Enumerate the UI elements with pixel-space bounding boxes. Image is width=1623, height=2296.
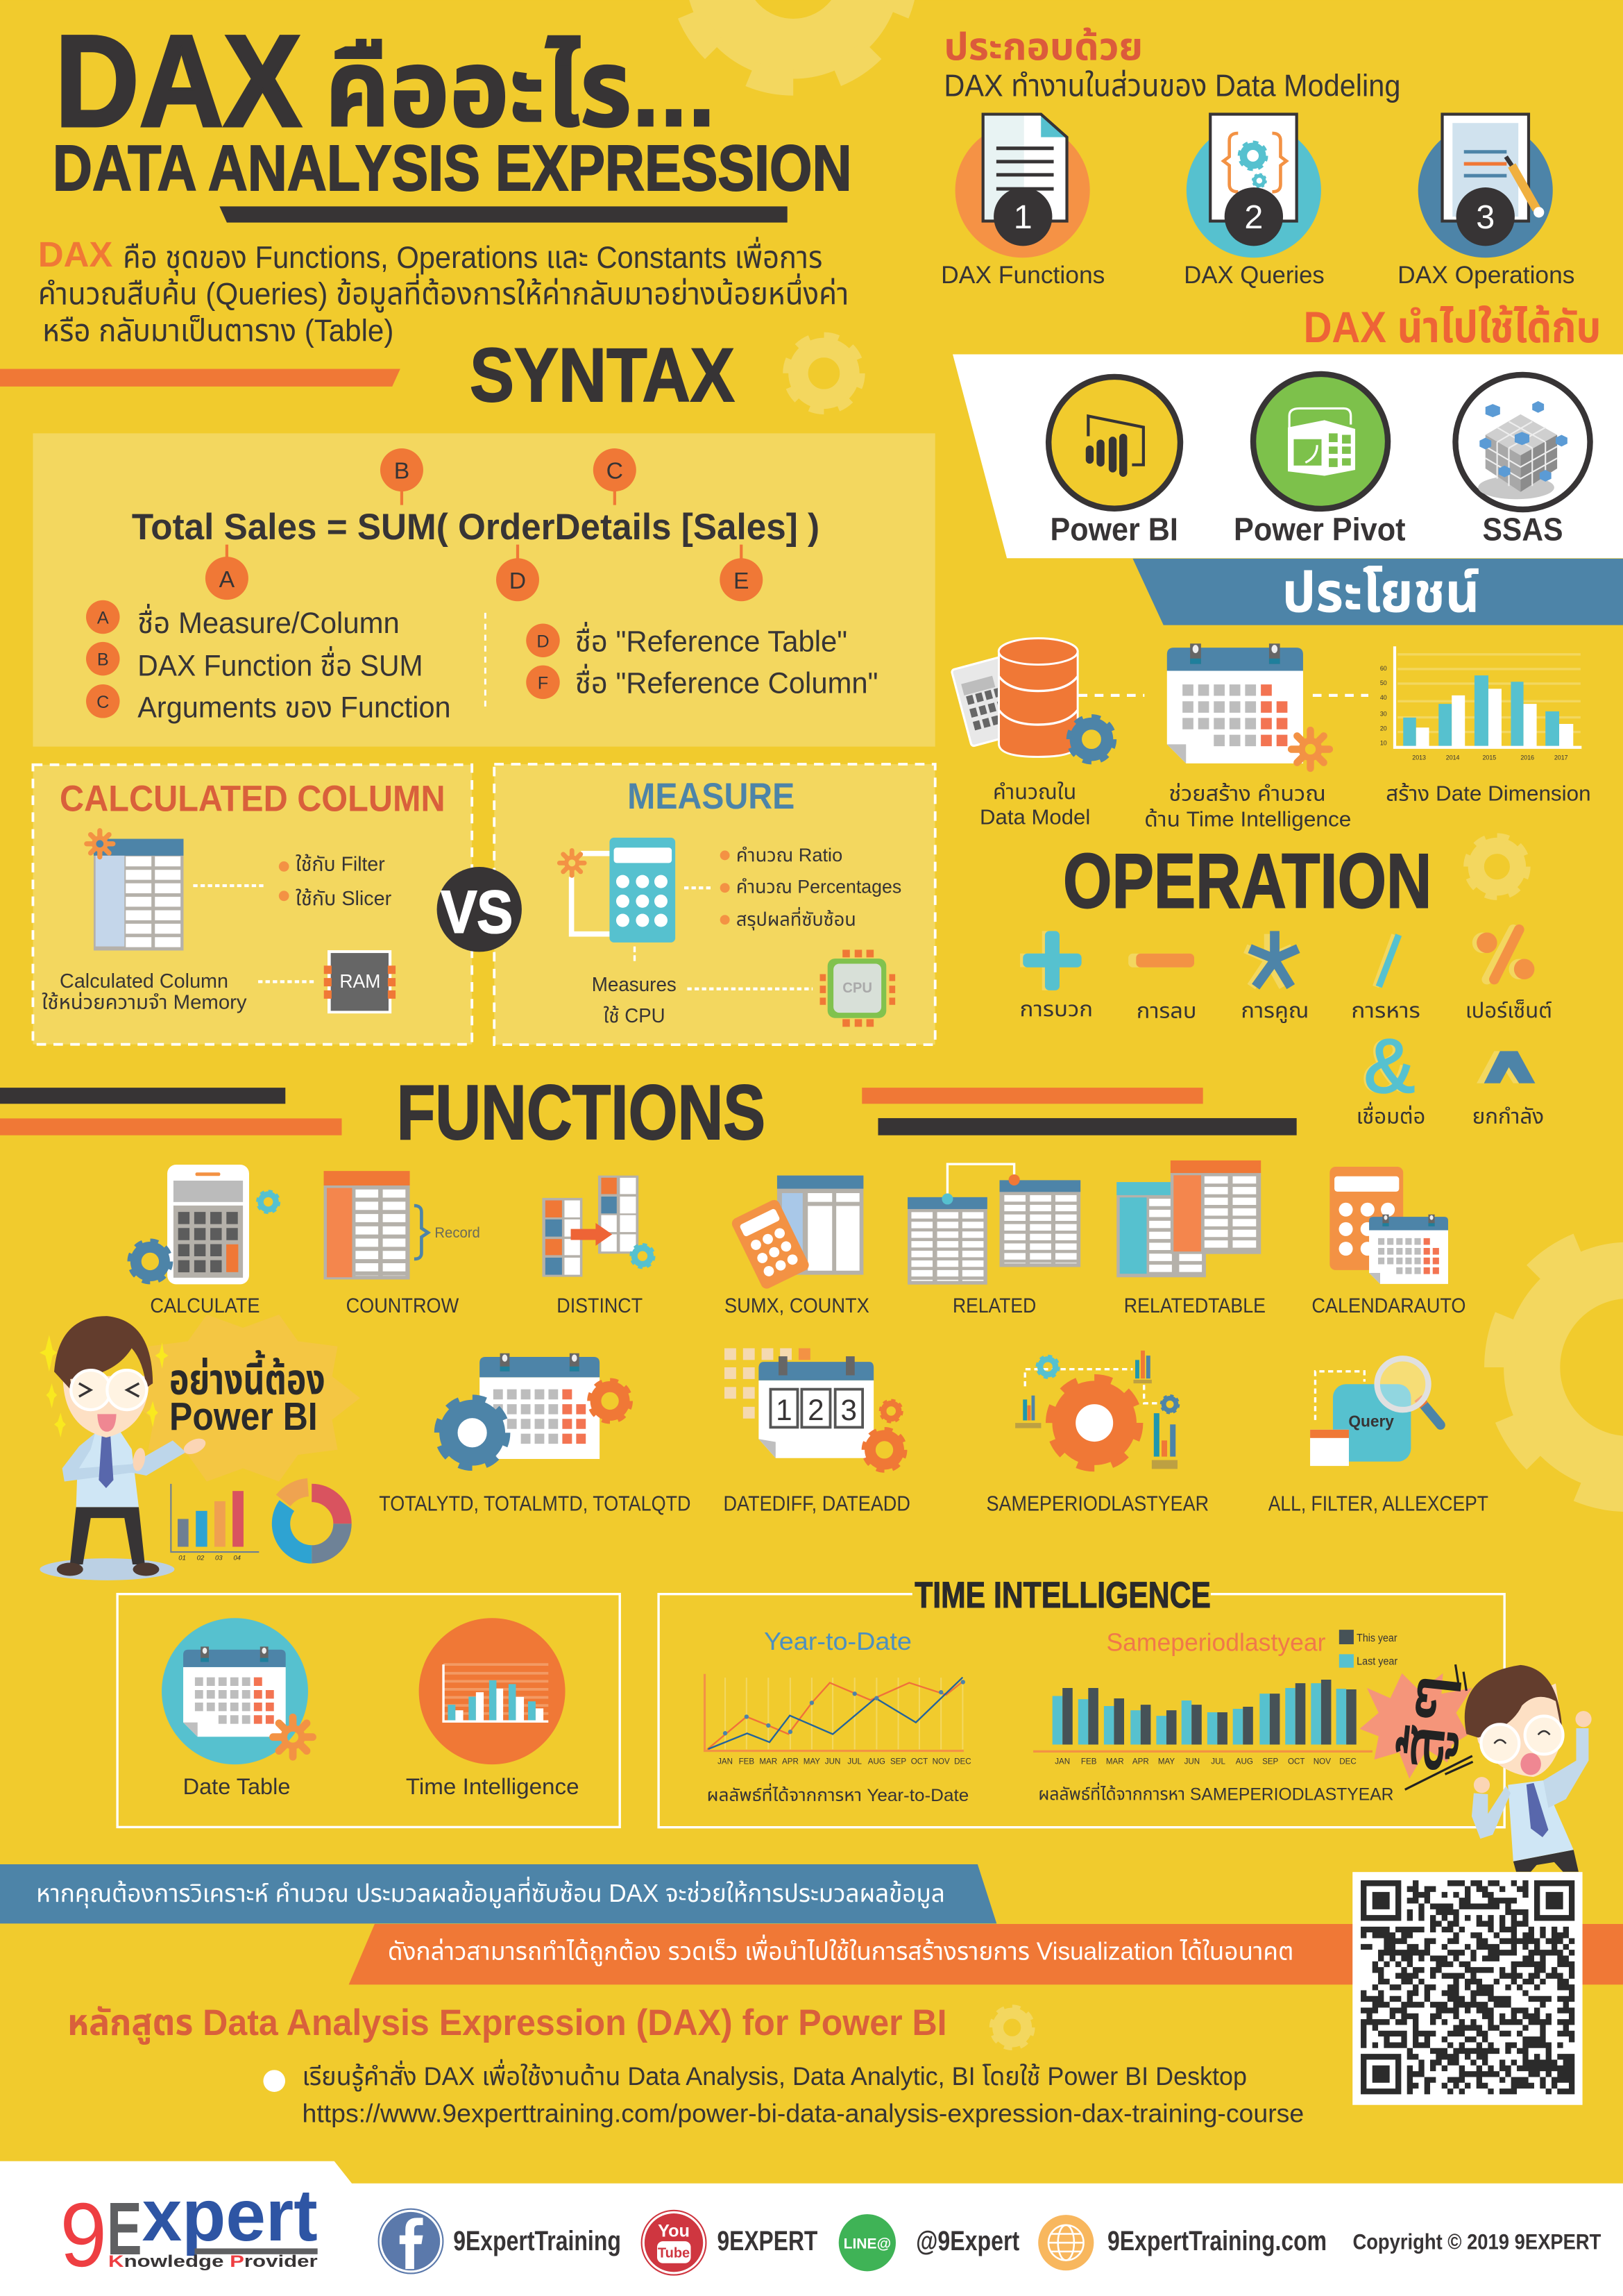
- website: [1038, 2215, 1327, 2270]
- benefit labels: ด้าน Time Intelligence: [1144, 808, 1351, 832]
- mini bar chart: [171, 1484, 259, 1562]
- list: left: [86, 600, 451, 724]
- function: totalytd: TOTALYTD, TOTALMTD, TOTALQTD: [379, 1492, 690, 1516]
- operator labels: การลบ: [1137, 999, 1196, 1022]
- illustration: presenter with power bi callout: [40, 1315, 360, 1580]
- function: datediff: 2: [808, 1394, 824, 1426]
- panel: syntax: [33, 433, 935, 747]
- function: distinct: DISTINCT: [556, 1294, 643, 1317]
- operator labels: เชื่อมต่อ: [1357, 1101, 1425, 1128]
- title: DAX: [55, 8, 301, 153]
- intro paragraph: คำนวณสืบค้น (Queries) ข้อมูลที่ต้องการให้ค่ากลับมาอย่างน้อยหนึ่งค่า: [38, 273, 849, 313]
- benefit labels: สร้าง Date Dimension: [1386, 782, 1591, 806]
- function: calendarauto: CALENDARAUTO: [1311, 1294, 1465, 1317]
- callout text: Power BI: [169, 1394, 318, 1439]
- bullets: [279, 854, 391, 910]
- list: left: Arguments ของ Function: [137, 691, 451, 724]
- list: right: D: [536, 632, 550, 651]
- title: คืออะไร...: [325, 28, 715, 149]
- icon: power bi: [1048, 377, 1180, 509]
- tool labels: SSAS: [1483, 511, 1563, 547]
- memory note: [42, 970, 247, 1013]
- labels: [183, 1773, 579, 1799]
- title: [53, 8, 852, 223]
- icon: power pivot: [1253, 374, 1388, 509]
- chart: year to date: OCT: [911, 1757, 928, 1766]
- logo: [60, 2175, 318, 2286]
- decorative gear: top: [681, 0, 905, 83]
- logo: K nowledge P rovider: [108, 2252, 318, 2271]
- chart: same period last year: OCT: [1288, 1757, 1305, 1766]
- legend: This year: [1357, 1632, 1397, 1644]
- function: datediff: 1: [776, 1394, 792, 1426]
- function: relatedtable: [1116, 1160, 1266, 1317]
- icon: ram chip: [324, 950, 396, 1013]
- chart: date dimension: 40: [1380, 694, 1387, 701]
- illustration: cheering character: [1359, 1664, 1592, 1872]
- bullets: คำนวณ Percentages: [736, 877, 901, 897]
- section: operators: [1020, 929, 1552, 1128]
- mini bar chart: 02: [197, 1554, 205, 1562]
- function: calculate: CALCULATE: [150, 1294, 260, 1317]
- heading: CALCULATED COLUMN: [60, 778, 445, 819]
- legend: Last year: [1357, 1655, 1397, 1667]
- chart: same period last year: DEC: [1339, 1757, 1357, 1766]
- logo: xpert: [142, 2175, 318, 2256]
- icon: table: [87, 831, 183, 950]
- decorative gear: right large: [1499, 1238, 1623, 1496]
- burst callout: สู้ๆ: [1390, 1670, 1465, 1775]
- heading: MEASURE: [627, 776, 794, 817]
- panel: measure: [494, 764, 935, 1045]
- icon: time intelligence: [419, 1618, 566, 1764]
- icon: cpu chip: [820, 949, 895, 1027]
- cpu note: Measures: [592, 974, 677, 996]
- labels: DAX Operations: [1397, 262, 1574, 289]
- subheading: DAX ทำงานในส่วนของ Data Modeling: [944, 69, 1400, 103]
- list: left: C: [96, 693, 109, 712]
- chart: date dimension: 20: [1380, 725, 1387, 732]
- chart: date dimension: 2013: [1412, 754, 1426, 761]
- icon: power caret: [1477, 1051, 1535, 1083]
- cpu note: [592, 974, 677, 1027]
- function: distinct: [542, 1176, 654, 1317]
- function: related: [908, 1164, 1080, 1317]
- intro paragraph: หรือ กลับมาเป็นตาราง (Table): [42, 314, 393, 348]
- operator labels: การคูณ: [1241, 999, 1309, 1023]
- function: all filter allexcept: Query: [1348, 1412, 1394, 1430]
- operator labels: เปอร์เซ็นต์: [1465, 999, 1552, 1022]
- section: components: [941, 26, 1574, 289]
- line: @9Expert: [916, 2226, 1019, 2256]
- panel: tools: [953, 354, 1623, 558]
- function: sumx countx: SUMX, COUNTX: [724, 1294, 869, 1317]
- intro paragraph: DAX: [38, 235, 113, 274]
- mini bar chart: 03: [215, 1554, 223, 1562]
- formula: Total Sales = SUM( OrderDetails [Sales] ): [132, 507, 819, 548]
- icon: functions: 1: [1014, 199, 1033, 236]
- chart: date dimension: 60: [1380, 665, 1387, 672]
- chart: date dimension: 2017: [1554, 754, 1568, 761]
- icon: ampersand: &: [1364, 1024, 1415, 1108]
- mini bar chart: 04: [233, 1554, 241, 1562]
- section: benefits: [951, 639, 1591, 832]
- intro paragraph: [38, 235, 849, 348]
- chart: same period last year: NOV: [1314, 1757, 1331, 1766]
- chart: year to date: [705, 1628, 971, 1805]
- chart: same period last year: SEP: [1262, 1757, 1279, 1766]
- icon: minus: [1128, 954, 1194, 968]
- mini donut: [281, 1487, 343, 1554]
- function: datediff: [724, 1349, 910, 1516]
- bullets: [720, 845, 901, 930]
- bullets: สรุปผลที่ซับซ้อน: [736, 906, 856, 930]
- icon: database and calculator: [951, 639, 1114, 762]
- function: all filter allexcept: ALL, FILTER, ALLEXCEPT: [1268, 1492, 1488, 1516]
- chart: date dimension: 2015: [1483, 754, 1496, 761]
- facebook: 9ExpertTraining: [453, 2226, 621, 2256]
- chart: date dimension: 50: [1380, 679, 1387, 686]
- formula badges: E: [733, 568, 749, 594]
- chart: same period last year: AUG: [1236, 1757, 1253, 1766]
- logo: E: [107, 2187, 142, 2270]
- youtube: 9EXPERT: [717, 2226, 818, 2256]
- icon: ram chip: RAM: [339, 970, 380, 992]
- facebook: [379, 2209, 621, 2273]
- list: left: ชื่อ Measure/Column: [137, 603, 400, 639]
- memory note: Calculated Column: [60, 970, 228, 993]
- benefit labels: Data Model: [980, 805, 1090, 829]
- formula badges: C: [606, 458, 623, 484]
- youtube: [642, 2211, 818, 2275]
- banner: benefits: [1132, 559, 1623, 625]
- chart: same period last year: JAN: [1055, 1757, 1070, 1766]
- qr code: [1352, 1872, 1583, 2105]
- benefit labels: ช่วยสร้าง คำนวณ: [1169, 782, 1326, 806]
- chart: same period last year: [1033, 1628, 1397, 1804]
- title: DATA ANALYSIS EXPRESSION: [53, 132, 852, 204]
- icon: date table: [162, 1618, 313, 1764]
- tool labels: Power Pivot: [1234, 511, 1406, 547]
- line: LINE@: [844, 2236, 891, 2252]
- chart: year to date: NOV: [933, 1757, 950, 1766]
- chart: date dimension: 30: [1380, 710, 1387, 717]
- heading: functions: [0, 1069, 1297, 1156]
- character: [40, 1316, 208, 1580]
- function: calendarauto: [1311, 1167, 1465, 1317]
- callout text: [169, 1349, 325, 1439]
- formula badges: A: [219, 566, 235, 593]
- chart: date dimension: 2016: [1520, 754, 1534, 761]
- course heading: หลักสูตร Data Analysis Expression (DAX) for Power BI: [67, 2002, 947, 2045]
- bullets: ใช้กับ Filter: [296, 854, 385, 876]
- icon: cpu chip: CPU: [842, 980, 872, 996]
- function: sameperiodlastyear: [987, 1351, 1209, 1516]
- formula badges: B: [394, 458, 409, 484]
- heading: components: ประกอบด้วย: [944, 26, 1143, 69]
- chart: year to date: MAR: [759, 1757, 777, 1766]
- chart: year to date: MAY: [804, 1757, 820, 1766]
- labels: [941, 262, 1574, 289]
- line: [839, 2214, 1019, 2271]
- youtube: You: [658, 2222, 690, 2241]
- function: countrow: [324, 1171, 480, 1317]
- labels: Date Table: [183, 1773, 290, 1799]
- heading: TIME INTELLIGENCE: [915, 1575, 1211, 1616]
- banner: blue: [0, 1864, 996, 1923]
- function: totalytd: [379, 1353, 690, 1516]
- icon: calculator: [559, 838, 675, 943]
- heading: functions: FUNCTIONS: [397, 1069, 765, 1156]
- function: sameperiodlastyear: SAMEPERIODLASTYEAR: [987, 1492, 1209, 1516]
- icon: queries: 2: [1244, 199, 1263, 236]
- icon: percent: [1472, 929, 1534, 979]
- list: right: ชื่อ "Reference Column": [575, 664, 878, 700]
- legend: [1339, 1630, 1397, 1668]
- banner: blue: หากคุณต้องการวิเคราะห์ คำนวณ ประมวลผลข้อมูลที่ซับซ้อน DAX จะช่วยให้การประมวลผลข้อมูล: [36, 1876, 945, 1908]
- chart: date dimension: 2014: [1446, 754, 1460, 761]
- icon: queries: [1187, 115, 1321, 258]
- bullets: คำนวณ Ratio: [736, 845, 842, 866]
- chart: same period last year: FEB: [1081, 1757, 1097, 1766]
- chart: same period last year: MAY: [1158, 1757, 1175, 1766]
- bullets: ใช้กับ Slicer: [296, 888, 391, 910]
- icon: plus: [1020, 931, 1082, 990]
- banner: orange: [349, 1924, 1623, 1984]
- youtube: Tube: [658, 2245, 690, 2261]
- list: right: [526, 622, 878, 700]
- operator labels: [1020, 997, 1552, 1128]
- character: [1465, 1665, 1592, 1872]
- chart: year to date: DEC: [954, 1757, 971, 1766]
- tool labels: [1050, 511, 1563, 547]
- icon: operations: 3: [1476, 199, 1495, 236]
- chart: year to date: APR: [782, 1757, 799, 1766]
- list: left: B: [97, 650, 109, 670]
- chart: year to date: Year-to-Date: [764, 1628, 912, 1655]
- list: left: DAX Function ชื่อ SUM: [137, 645, 423, 682]
- benefit labels: [980, 780, 1591, 832]
- panel: calculated column: [33, 765, 472, 1045]
- function: related: RELATED: [953, 1294, 1036, 1317]
- banner: benefits: ประโยชน์: [1282, 562, 1479, 624]
- banner: orange: ดังกล่าวสามารถทำได้ถูกต้อง รวดเร็ว เพื่อนำไปใช้ในการสร้างรายการ Visualization ได้ในอนาคต: [388, 1934, 1293, 1966]
- function: countrow: Record: [434, 1225, 480, 1241]
- function: datediff: DATEDIFF, DATEADD: [724, 1492, 910, 1516]
- chart: same period last year: Sameperiodlastyear: [1106, 1628, 1325, 1656]
- icon: calendar: [1167, 643, 1329, 768]
- footer: [0, 2161, 1623, 2296]
- formula badges: [205, 448, 763, 601]
- function: sumx countx: [724, 1176, 869, 1317]
- chart: year to date: FEB: [739, 1757, 754, 1766]
- icon: operations: [1418, 115, 1553, 258]
- chart: year to date: JUL: [847, 1757, 863, 1766]
- function: relatedtable: RELATEDTABLE: [1124, 1294, 1266, 1317]
- heading: syntax: [0, 333, 860, 418]
- labels: DAX Functions: [941, 262, 1105, 289]
- panel: time intelligence: [658, 1575, 1504, 1827]
- course description: [263, 2059, 1304, 2127]
- function: calculate: [130, 1165, 279, 1317]
- cpu note: ใช้ CPU: [604, 1005, 665, 1027]
- icon: functions: [955, 115, 1090, 258]
- chart: same period last year: APR: [1132, 1757, 1149, 1766]
- list: left: A: [97, 609, 109, 628]
- chart: year to date: JAN: [717, 1757, 733, 1766]
- chart: year to date: ผลลัพธ์ที่ได้จากการหา Year-to-Date: [707, 1783, 969, 1805]
- list: right: F: [538, 673, 548, 693]
- list: right: ชื่อ "Reference Table": [575, 622, 847, 658]
- mini bar chart: 01: [178, 1554, 186, 1562]
- callout text: อย่างนี้ต้อง: [169, 1349, 325, 1403]
- chart: year to date: SEP: [890, 1757, 906, 1766]
- chart: same period last year: MAR: [1106, 1757, 1124, 1766]
- function: datediff: 3: [841, 1394, 857, 1426]
- heading: syntax: SYNTAX: [470, 333, 735, 418]
- course description: เรียนรู้คำสั่ง DAX เพื่อใช้งานด้าน Data Analysis, Data Analytic, BI โดยใช้ Power BI Desktop: [303, 2059, 1247, 2092]
- heading: operation: OPERATION: [1063, 838, 1431, 925]
- chart: year to date: JUN: [825, 1757, 840, 1766]
- icon: divide: [1376, 935, 1399, 987]
- intro paragraph: คือ ชุดของ Functions, Operations และ Constants เพื่อการ: [123, 237, 822, 276]
- icon: multiply: [1246, 931, 1298, 987]
- labels: DAX Queries: [1184, 262, 1325, 289]
- icon: ampersand: &: [1361, 1024, 1411, 1108]
- burst callout: [1359, 1664, 1473, 1789]
- chart: date dimension: [1380, 646, 1581, 761]
- badge: vs: VS: [441, 879, 513, 946]
- operator labels: การบวก: [1020, 997, 1093, 1021]
- formula badges: D: [509, 568, 526, 594]
- labels: Time Intelligence: [406, 1773, 579, 1799]
- benefit labels: คำนวณใน: [993, 780, 1076, 804]
- function: countrow: COUNTROW: [346, 1294, 459, 1317]
- operator labels: การหาร: [1351, 999, 1420, 1022]
- course description: https://www.9experttraining.com/power-bi-data-analysis-expression-dax-training-course: [303, 2099, 1304, 2127]
- chart: same period last year: JUL: [1211, 1757, 1225, 1766]
- chart: same period last year: JUN: [1184, 1757, 1200, 1766]
- website: 9ExpertTraining.com: [1107, 2226, 1327, 2256]
- logo: 9: [60, 2184, 107, 2286]
- function: all filter allexcept: [1268, 1358, 1488, 1516]
- operator labels: ยกกำลัง: [1472, 1104, 1544, 1128]
- chart: date dimension: 10: [1380, 740, 1387, 747]
- panel: date table and time intelligence: [117, 1594, 620, 1827]
- memory note: ใช้หน่วยความจำ Memory: [42, 991, 247, 1013]
- tool labels: Power BI: [1050, 511, 1178, 547]
- callout burst: [126, 1315, 360, 1481]
- icon: ssas: [1456, 375, 1590, 509]
- chart: year to date: AUG: [868, 1757, 885, 1766]
- chart: same period last year: ผลลัพธ์ที่ได้จากการหา SAMEPERIODLASTYEAR: [1038, 1782, 1394, 1804]
